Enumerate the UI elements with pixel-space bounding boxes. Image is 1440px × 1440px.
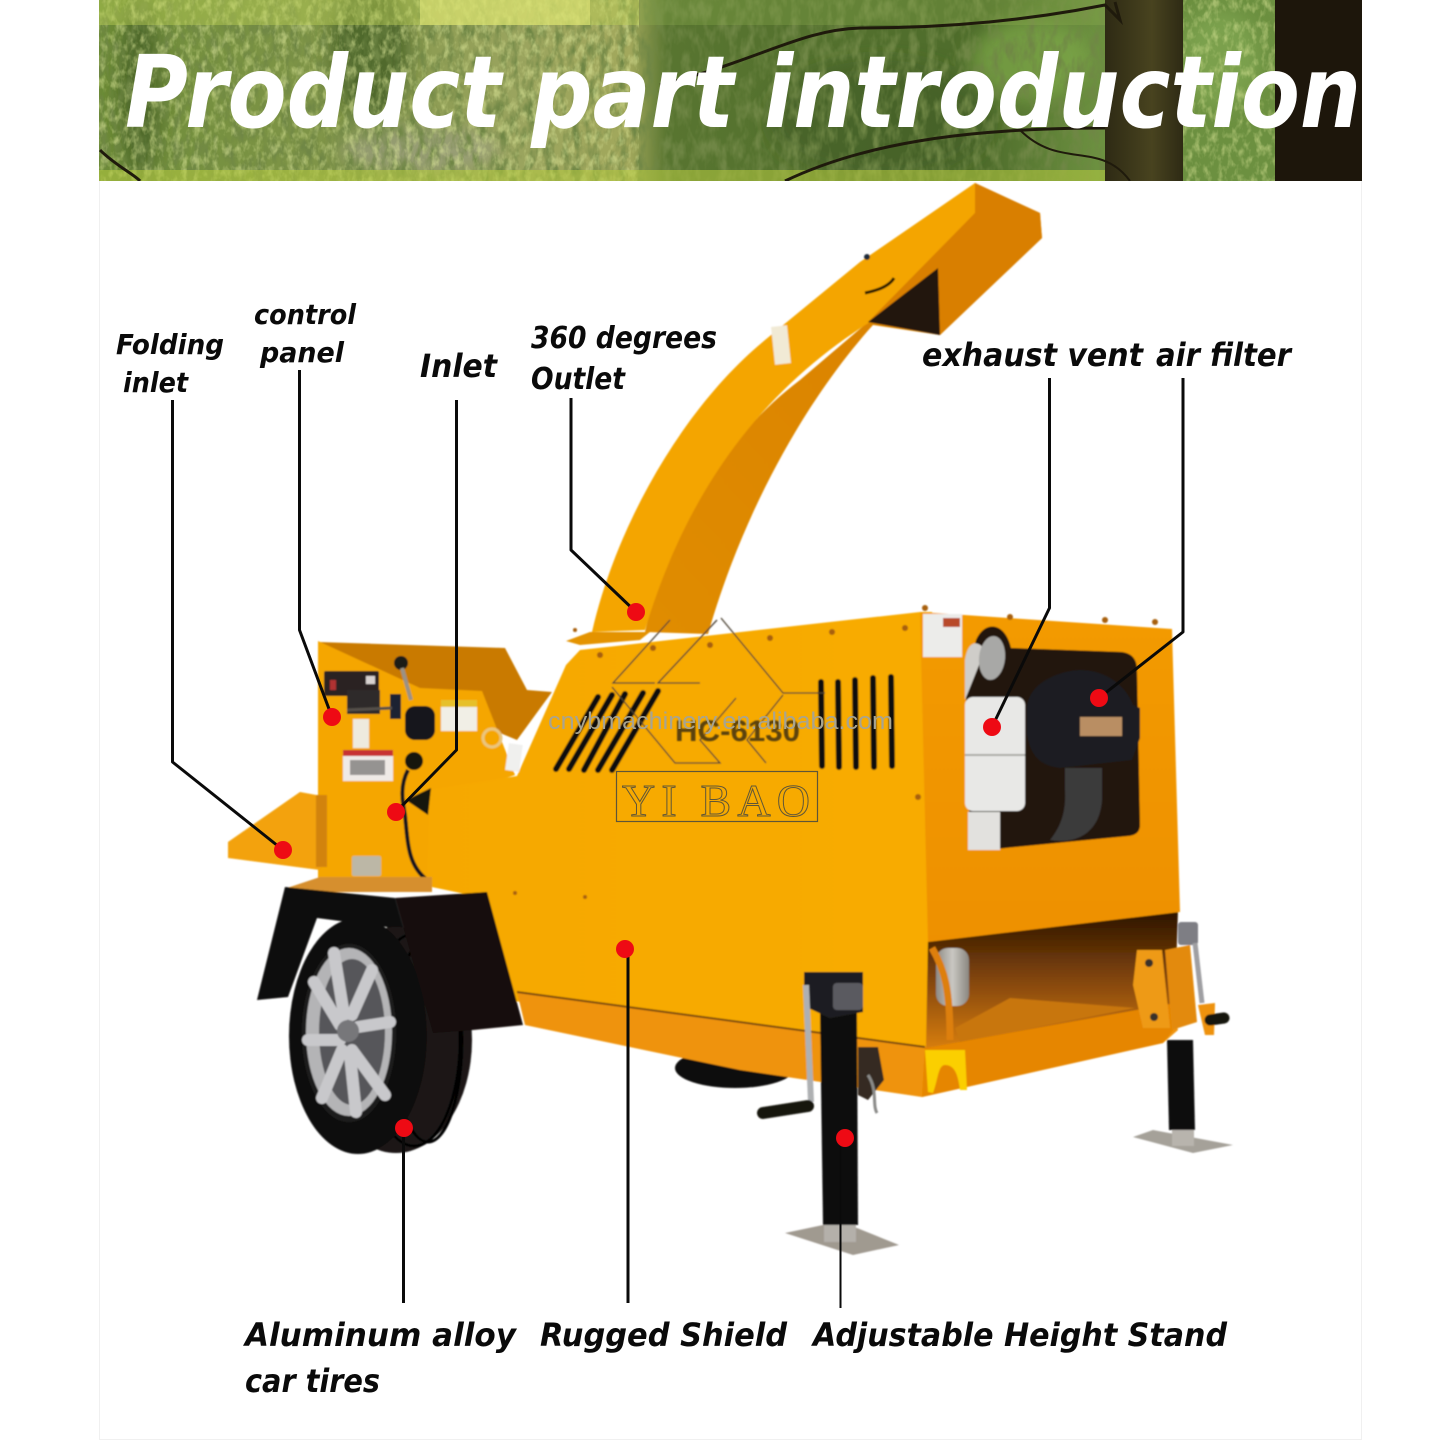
opening under engine box bbox=[926, 910, 1178, 1048]
label: control panel: control bbox=[254, 298, 356, 331]
front jack stand bbox=[763, 972, 899, 1255]
front fender bbox=[395, 892, 523, 1033]
label: 360 degrees outlet: Outlet bbox=[531, 362, 626, 397]
label: 360 degrees outlet: 360 degrees bbox=[531, 321, 717, 356]
label: exhaust vent: exhaust vent bbox=[922, 336, 1145, 374]
decal top of side panel bbox=[923, 614, 962, 657]
rivets bbox=[513, 605, 1158, 899]
far wheel bbox=[675, 1048, 795, 1088]
discharge chute bbox=[566, 183, 1042, 645]
yellow hitch bracket bbox=[925, 1050, 967, 1093]
label: folding inlet: inlet bbox=[123, 366, 189, 399]
aluminium alloy rim bbox=[306, 948, 392, 1116]
label: control panel bbox=[254, 298, 356, 369]
label: 360 degrees outlet bbox=[531, 321, 717, 397]
machine illustration: wood chipper bbox=[228, 183, 1233, 1255]
banner: forest photo header bbox=[99, 0, 1362, 181]
inlet hose and motor bbox=[352, 752, 431, 880]
control box panel bbox=[318, 641, 515, 884]
fuel tank plate bbox=[287, 877, 432, 892]
model number: HC-6130 bbox=[675, 715, 800, 748]
label: adjustable height stand: Adjustable Height Stand bbox=[810, 1316, 1228, 1354]
hopper back panel bbox=[318, 642, 552, 740]
control panel switches bbox=[324, 656, 523, 781]
label: air filter: air filter bbox=[1156, 336, 1293, 374]
warning decal on chute bbox=[771, 325, 791, 365]
label: control panel: panel bbox=[259, 336, 344, 369]
leader lines bbox=[172, 370, 1183, 1308]
winch drum bbox=[936, 948, 969, 1006]
engine box side bbox=[920, 612, 1180, 942]
callout markers bbox=[274, 603, 1108, 1147]
base frame bbox=[517, 992, 1178, 1097]
exhaust muffler bbox=[965, 635, 1025, 850]
left louvre vents bbox=[556, 691, 658, 770]
right louvre vents bbox=[821, 677, 892, 767]
left fender bbox=[257, 887, 433, 1033]
label: inlet: Inlet bbox=[420, 347, 499, 385]
page frame bbox=[99, 181, 1362, 1440]
watermark logo box: YI BAO bbox=[622, 775, 810, 826]
label: folding inlet: Folding bbox=[116, 328, 224, 361]
engine window bbox=[965, 627, 1140, 850]
tyre and tread bbox=[289, 918, 472, 1154]
air filter bbox=[1027, 670, 1140, 841]
watermark url: cnybmachinery.en.alibaba.com bbox=[548, 708, 893, 735]
label: aluminum alloy car tires: Aluminum alloy bbox=[242, 1316, 517, 1354]
label: rugged shield: Rugged Shield bbox=[540, 1316, 788, 1354]
rear jack stand bbox=[1133, 922, 1233, 1153]
label: aluminum alloy car tires bbox=[242, 1316, 517, 1400]
folding inlet bbox=[228, 792, 327, 870]
logo watermark lines bbox=[612, 618, 825, 763]
main body front face bbox=[427, 612, 932, 1050]
label: aluminum alloy car tires: car tires bbox=[245, 1362, 380, 1400]
label: folding inlet bbox=[116, 328, 224, 399]
